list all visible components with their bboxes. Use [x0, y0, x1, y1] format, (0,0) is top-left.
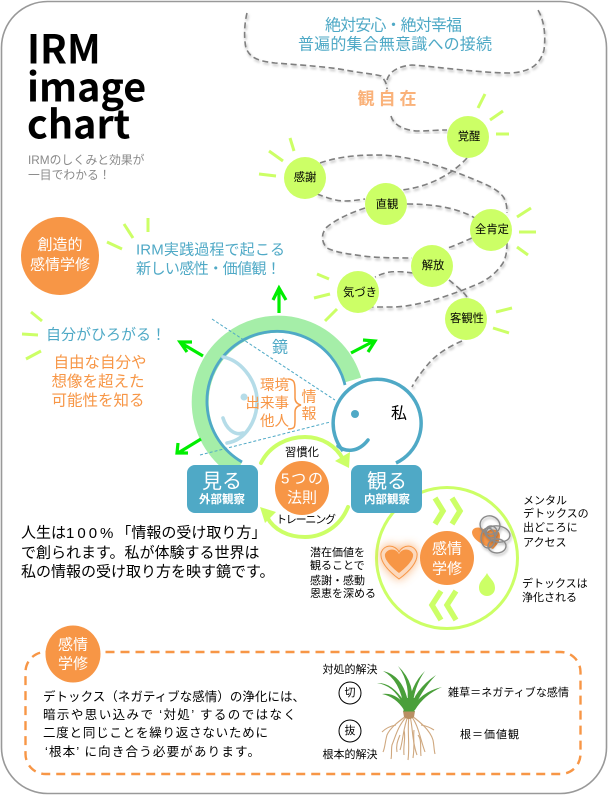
text: main statement: 私の情報の受け取り方を映す鏡です。 — [21, 564, 275, 580]
text: detox purified — [522, 576, 588, 604]
label: coping solution: 対処的解決 — [322, 662, 378, 676]
node: kyakkansei: 客観性 — [450, 311, 484, 325]
node: kaiho — [411, 245, 453, 287]
rays: kakusei — [478, 94, 509, 134]
icon: pull: 抜 — [344, 723, 356, 737]
top text: absolute peace: 絶対安心・絶対幸福 — [325, 16, 462, 34]
node: kizuki — [337, 271, 379, 313]
text: environment, events, others: 他人 — [260, 413, 289, 430]
text: main statement — [21, 524, 275, 580]
badge: creative emotion study — [21, 217, 99, 295]
text: mental detox: メンタル — [523, 494, 567, 507]
ground line — [317, 711, 484, 713]
node: kizuki: 気づき — [343, 285, 377, 299]
node: kansha: 感謝 — [294, 170, 316, 184]
heading: kanjizai: 観自在 — [358, 88, 420, 108]
panel: emotion study — [26, 652, 580, 774]
rays: kansha — [259, 138, 294, 176]
box: see: 見る — [202, 471, 242, 493]
icon: heart — [381, 545, 417, 580]
node: chokkan: 直観 — [376, 197, 398, 211]
box: observe: 観る — [367, 470, 407, 493]
text: environment, events, others — [246, 377, 289, 430]
node: kansha — [284, 157, 326, 199]
label: mirror: 鏡 — [272, 338, 288, 356]
dashed path: spiral — [245, 10, 545, 387]
text: mental detox — [523, 494, 589, 549]
text: main statement: で創られます。私が体験する世界は — [21, 544, 260, 562]
text: self expands: 自分がひろがる！ — [46, 326, 166, 344]
text: mental detox: 出どころに — [523, 521, 578, 534]
icon: weed plant — [377, 666, 442, 760]
cycle arrow: training — [260, 507, 348, 537]
icon: cut — [339, 682, 361, 704]
text: detox purified: デトックスは — [522, 576, 588, 590]
badge: creative emotion study: 感情学修 — [30, 256, 90, 274]
rays: kizuki — [314, 274, 337, 321]
text: gratitude — [310, 545, 376, 600]
arrow: upper right — [351, 340, 375, 353]
icon: orange heart with tangled lines — [472, 513, 511, 553]
text: gratitude: 潜在価値を — [310, 545, 365, 559]
text: free self — [51, 354, 147, 410]
text: free self: 想像を超えた — [51, 372, 145, 390]
circle: five laws — [275, 461, 329, 515]
sight lines — [200, 319, 350, 455]
node: kaiho: 解放 — [422, 258, 444, 272]
text: main statement: 人生は100%「情報の受け取り方」 — [21, 524, 266, 542]
text: information — [301, 388, 317, 422]
cycle arrow: habit — [261, 437, 350, 468]
circle: five laws: 5つの — [281, 470, 323, 488]
emotion cycle ring — [376, 488, 518, 628]
text: detox explanation: 暗示や思い込みで ‘対処’ するのではなく — [43, 708, 296, 722]
arrow: lower left — [177, 439, 201, 453]
title: IRM — [27, 18, 101, 76]
arrow: up — [273, 288, 286, 313]
label: self: 私 — [391, 404, 407, 422]
mirror ring — [200, 324, 353, 469]
brace — [288, 379, 301, 429]
text: detox explanation: デトックス（ネガティブな感情）の浄化には、 — [43, 689, 305, 704]
text: new sensibility: 新しい感性・価値観！ — [136, 260, 281, 278]
text: free self: 可能性を知る — [51, 392, 145, 410]
top text: absolute peace: 普遍的集合無意識への接続 — [298, 36, 492, 54]
text: environment, events, others: 環境 — [260, 377, 289, 394]
text: detox explanation: ‘根本’ に向き合う必要があります。 — [45, 744, 260, 759]
circle: emotion study — [420, 531, 474, 585]
icon: drop — [479, 573, 495, 596]
text: gratitude: 観ることで — [310, 558, 365, 572]
text: mental detox: アクセス — [523, 536, 566, 549]
self face — [329, 375, 425, 471]
node: zenkotei: 全肯定 — [475, 222, 509, 236]
text: new sensibility — [136, 242, 285, 278]
label: habit: 習慣化 — [285, 445, 319, 459]
text: detox explanation: 二度と同じことを繰り返さないために — [43, 725, 268, 740]
rays: self expands — [22, 312, 42, 359]
circle: emotion study: 感情 — [432, 540, 462, 558]
badge: creative emotion study: 創造的 — [37, 236, 83, 254]
box: see — [187, 465, 258, 513]
rays: zenkotei — [517, 208, 536, 255]
text: information: 情 — [301, 388, 317, 406]
circle: emotion study: 学修 — [432, 560, 462, 578]
text: gratitude: 恩恵を深める — [310, 586, 376, 600]
subtitle — [28, 153, 145, 182]
badge: emotion study: 感情 — [58, 636, 88, 654]
label: training: トレーニング — [276, 512, 336, 526]
text: environment, events, others: 出来事 — [246, 395, 289, 412]
node: chokkan — [365, 183, 407, 225]
label: weeds: 雑草＝ネガティブな感情 — [448, 685, 569, 699]
rays: creative badge — [107, 218, 148, 249]
node: kyakkansei — [445, 298, 487, 340]
text: new sensibility: IRM実践過程で起こる — [136, 242, 285, 258]
box: observe — [351, 465, 422, 513]
text: detox purified: 浄化される — [522, 590, 577, 604]
subtitle: 一目でわかる！ — [28, 168, 111, 182]
top text: absolute peace — [298, 16, 492, 54]
text: gratitude: 感謝・感動 — [310, 573, 365, 587]
label: roots: 根＝価値観 — [460, 727, 519, 741]
box: see: 外部観察 — [199, 492, 245, 506]
arrow: upper left — [180, 342, 203, 356]
node: zenkotei — [470, 209, 512, 251]
box: observe: 内部観察 — [364, 492, 410, 506]
title: chart — [27, 94, 130, 150]
text: information: 報 — [301, 406, 317, 422]
rays: kyakkansei — [493, 308, 512, 333]
title — [27, 18, 146, 150]
reflected face — [223, 357, 257, 443]
node: kakusei: 覚醒 — [458, 130, 480, 143]
badge: emotion study — [46, 626, 100, 682]
text: free self: 自由な自分や — [53, 354, 147, 372]
icon: cut: 切 — [344, 686, 356, 699]
node: kakusei — [447, 116, 489, 158]
text: mental detox: デトックスの — [523, 506, 589, 520]
icon: pull — [339, 720, 361, 742]
chevrons: top — [435, 498, 460, 524]
circle: five laws: 法則 — [287, 490, 317, 506]
label: root solution: 根本的解決 — [322, 747, 378, 761]
title: image — [27, 56, 146, 114]
text: detox explanation — [43, 689, 305, 759]
subtitle: IRMのしくみと効果が — [28, 153, 145, 167]
chevrons: bottom — [432, 591, 456, 620]
badge: emotion study: 学修 — [58, 656, 88, 672]
